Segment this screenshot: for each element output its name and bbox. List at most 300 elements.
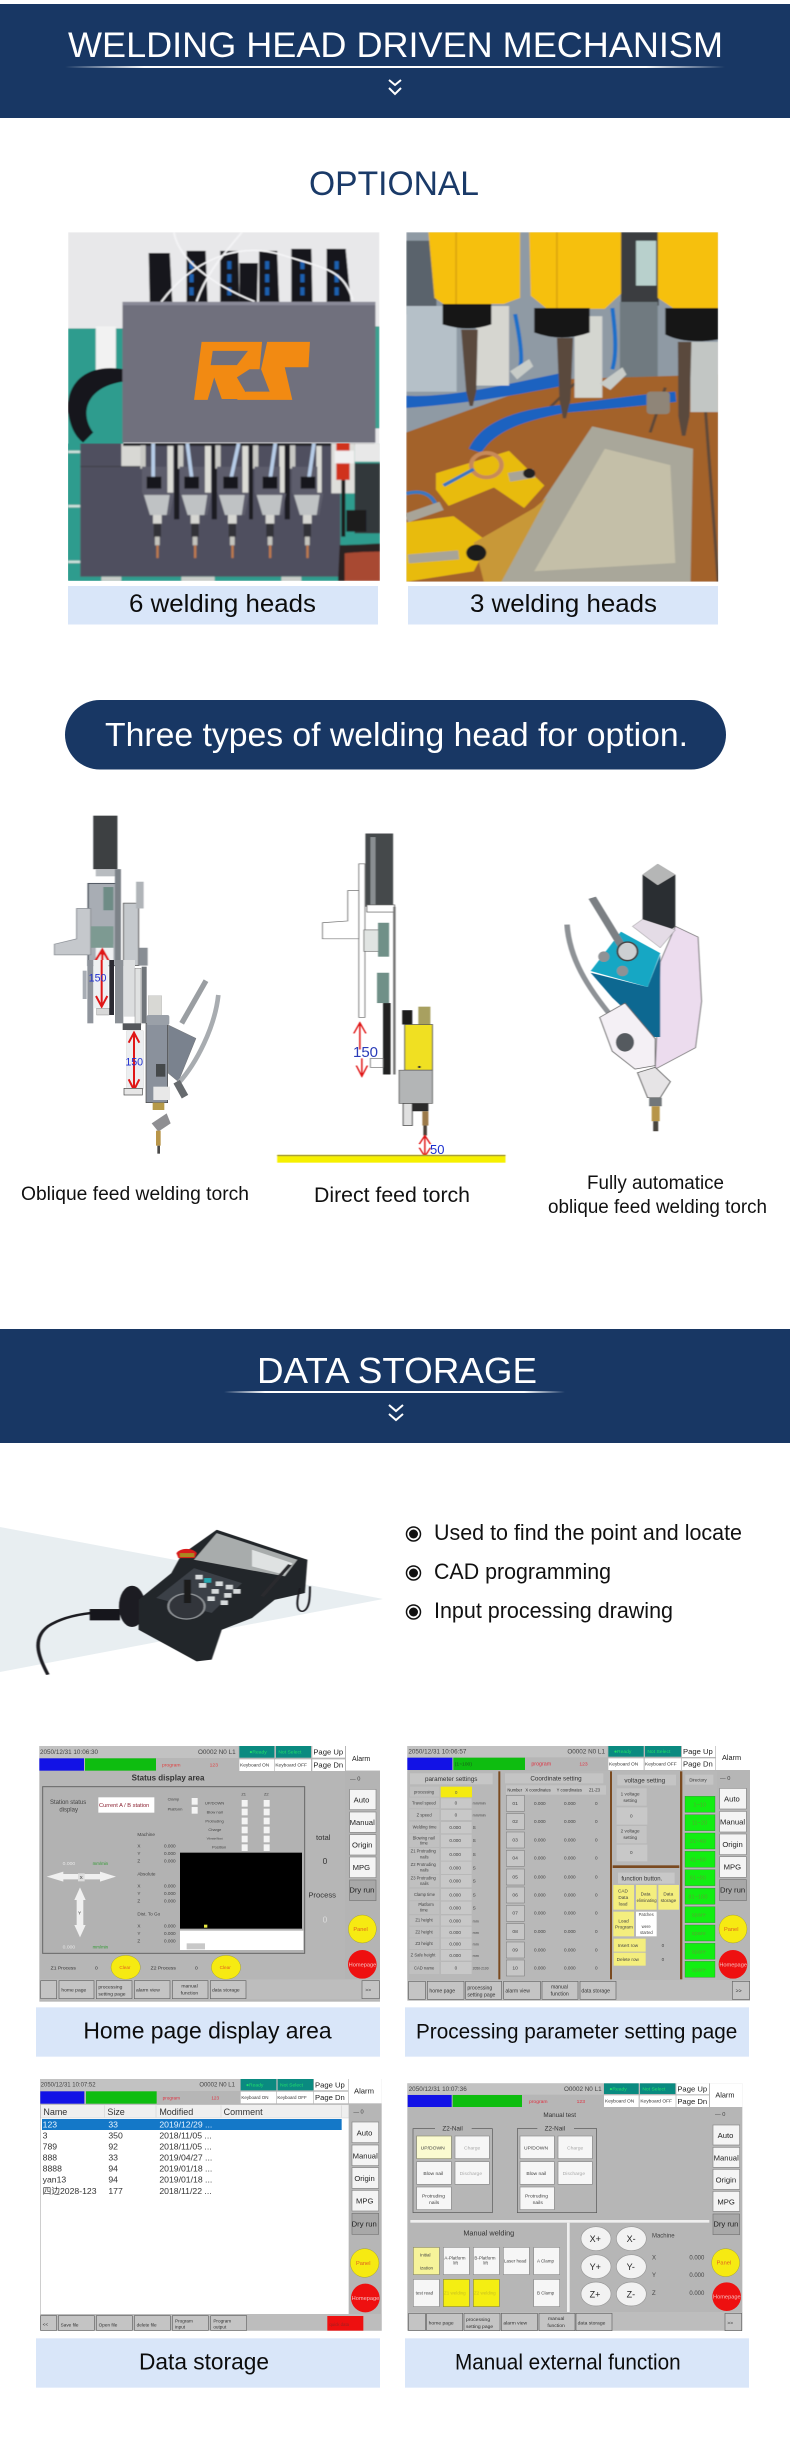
panel: processing parameter setting page: 0.000 <box>449 1941 461 1946</box>
panel: processing parameter setting page: 0 <box>455 1801 458 1806</box>
panel: home page display area: mm/min <box>93 1861 109 1866</box>
panel: data storage: Program <box>213 2318 231 2323</box>
caption: Oblique feed welding torch <box>21 1184 249 1205</box>
panel: processing parameter setting page: Data <box>663 1892 674 1897</box>
panel: processing parameter setting page: 0 <box>662 1957 665 1962</box>
panel: manual external function: Protruding <box>525 2193 548 2199</box>
panel: manual external function: nails <box>533 2200 543 2206</box>
panel: home page display area: Process <box>308 1891 336 1900</box>
diagram: direct feed torch: 150 <box>353 1044 378 1061</box>
head unit repeated five times <box>140 443 179 558</box>
panel: manual external function: Z1 welding <box>444 2290 466 2295</box>
panel: home page display area: 0.000 <box>63 1861 75 1867</box>
panel: manual external function: Panel <box>717 2261 731 2267</box>
diagram: oblique feed welding torch <box>21 816 249 1205</box>
panel: home page display area: display <box>59 1807 78 1813</box>
panel: data storage: Save file <box>61 2322 79 2327</box>
panel: data storage: output <box>213 2325 227 2330</box>
panel: home page display area: 0 <box>95 1965 98 1971</box>
panel: processing parameter setting page: were <box>642 1924 651 1929</box>
panel: manual external function: setting page <box>466 2324 493 2330</box>
panel: home page display area: 0.000 <box>164 1844 176 1849</box>
panel: processing parameter setting page: Page Dn <box>683 1760 713 1769</box>
panel: manual external function: Auto <box>718 2131 733 2140</box>
panel: processing parameter setting page: Auto <box>724 1794 740 1803</box>
panel: data storage: Panel <box>356 2261 370 2267</box>
illustration: handheld controller <box>0 1527 383 1675</box>
panel: processing parameter setting page: 0 <box>455 1966 458 1971</box>
panel: data storage: << <box>43 2322 48 2327</box>
panel: processing parameter setting page: home page <box>429 1989 455 1995</box>
panel: processing parameter setting page: Keyboard ON <box>609 1762 639 1768</box>
panel: processing parameter setting page: 0.000 <box>564 1856 576 1861</box>
panel: home page display area: 0.000 <box>164 1891 176 1896</box>
panel: home page display area: total <box>316 1833 331 1842</box>
panel: home page display area: Position <box>212 1845 226 1850</box>
panel: processing parameter setting page: Homepage <box>719 1962 747 1968</box>
panel: data storage: 2050/12/31 10:07:52 <box>41 2083 96 2089</box>
panel: processing parameter setting page: 123 <box>579 1762 588 1768</box>
panel: processing parameter setting page: Origin <box>722 1840 743 1849</box>
panel: processing parameter setting page: Travel speed <box>412 1801 437 1806</box>
panel: home page display area: Platform <box>168 1807 183 1812</box>
panel: home page display area: Current A / B station <box>99 1803 149 1809</box>
file list <box>41 2105 349 2314</box>
caption <box>36 2338 380 2388</box>
panel: processing parameter setting page: Patches <box>639 1912 654 1917</box>
file list: 四边2028-123 <box>43 2186 97 2196</box>
panel: processing parameter setting page: (1~100) <box>455 1762 472 1768</box>
panel: processing parameter setting page: MPG <box>724 1863 741 1872</box>
panel: manual external function: Not Select <box>642 2086 666 2092</box>
panel: home page display area: setting page <box>98 1992 126 1998</box>
panel: home page display area: Z <box>137 1899 140 1904</box>
panel: processing parameter setting page: function button. <box>621 1876 663 1882</box>
panel: home page display area: Station status <box>50 1800 86 1806</box>
panel: home page display area: X <box>137 1924 141 1929</box>
panel: home page display area: Y <box>137 1851 140 1856</box>
panel: manual external function: Z2 welding <box>474 2290 496 2295</box>
panel: home page display area <box>36 1746 380 2057</box>
icon: double chevron <box>389 80 401 94</box>
panel: processing parameter setting page: Panel <box>724 1927 738 1933</box>
panel: home page display area: Homepage <box>349 1962 376 1968</box>
panel: processing parameter setting page: spare <box>692 1967 706 1973</box>
panel: processing parameter setting page: Delete row <box>617 1957 640 1962</box>
panel: processing parameter setting page: Data <box>618 1895 629 1900</box>
panel: processing parameter setting page: nails <box>420 1868 429 1873</box>
caption: 3 welding heads <box>408 586 718 624</box>
panel: processing parameter setting page: spare <box>692 1931 706 1937</box>
panel: processing parameter setting page: Page Up <box>683 1747 713 1756</box>
panel: processing parameter setting page: 0 <box>595 1947 598 1952</box>
panel: data storage: Data storage <box>139 2348 269 2374</box>
panel: processing parameter setting page: 0.000 <box>449 1825 461 1830</box>
panel: home page display area: 0.000 <box>164 1924 176 1929</box>
panel: processing parameter setting page: 0.000 <box>564 1819 576 1824</box>
panel: processing parameter setting page: 0.000 <box>564 1965 576 1970</box>
panel: manual external function: Discharge <box>563 2171 585 2177</box>
panel: home page display area: Page Up <box>313 1747 343 1756</box>
panel: processing parameter setting page: 11~20 <box>692 1821 707 1827</box>
panel: home page display area: Machine <box>137 1832 155 1837</box>
panel: processing parameter setting page: 2050-2100 <box>473 1966 489 1970</box>
panel: manual external function: lift <box>453 2261 459 2266</box>
panel: home page display area: 0.000 <box>164 1859 176 1864</box>
panel: processing parameter setting page: Z speed <box>417 1812 432 1817</box>
panel: home page display area: 0.000 <box>63 1944 75 1950</box>
torch lower assembly <box>83 960 218 1154</box>
panel: home page display area: 0.000 <box>164 1931 176 1936</box>
panel: processing parameter setting page: 0.000 <box>449 1918 461 1923</box>
panel: processing parameter setting page: alarm view <box>505 1989 530 1995</box>
panel: processing parameter setting page: Clamp time <box>414 1892 436 1897</box>
panel: processing parameter setting page: S <box>473 1906 476 1911</box>
panel: data storage: MPG <box>356 2197 373 2206</box>
panel: manual external function <box>405 2083 749 2388</box>
panel: processing parameter setting page <box>405 1746 750 2057</box>
panel: processing parameter setting page: S <box>473 1879 476 1884</box>
panel: manual external function: Z <box>652 2291 656 2297</box>
panel: processing parameter setting page: storage <box>661 1898 677 1903</box>
panel: processing parameter setting page: 0.000 <box>564 1874 576 1879</box>
panel: processing parameter setting page: function <box>551 1991 569 1997</box>
panel: manual external function: nails <box>429 2200 440 2206</box>
panel: processing parameter setting page: Directory <box>689 1777 707 1782</box>
panel: processing parameter setting page: voltage setting <box>624 1777 666 1784</box>
file list: 94 <box>108 2163 118 2173</box>
panel: home page display area: alarm view <box>136 1988 160 1994</box>
panel: processing parameter setting page: 0 <box>595 1874 598 1879</box>
photo: 6 welding heads <box>68 232 380 581</box>
panel: processing parameter setting page: manual <box>551 1984 568 1990</box>
panel: home page display area: Protruding <box>205 1818 224 1823</box>
panel: processing parameter setting page: Alarm <box>722 1753 741 1762</box>
panel: manual external function: A Clamp <box>537 2259 554 2264</box>
caption: 6 welding heads <box>68 586 378 624</box>
panel: data storage: Not Select <box>280 2083 304 2089</box>
panel: manual external function: Manual <box>714 2153 739 2162</box>
panel: data storage: Origin <box>354 2174 375 2183</box>
panel: processing parameter setting page: Load <box>618 1918 629 1923</box>
panel: processing parameter setting page: O0002 N0 L1 <box>567 1749 605 1756</box>
panel: processing parameter setting page: 0 <box>595 1892 598 1897</box>
panel: home page display area: MPG <box>353 1863 370 1872</box>
panel: manual external function: Manual external function <box>455 2349 681 2374</box>
panel: processing parameter setting page: 0 <box>662 1943 665 1948</box>
file list: 123 <box>43 2119 57 2129</box>
icon: double chevron <box>389 1405 403 1420</box>
panel: home page display area: Z1 Process <box>51 1965 76 1971</box>
panel: processing parameter setting page: mm <box>473 1954 479 1958</box>
panel: processing parameter setting page: Data <box>641 1892 651 1897</box>
panel: home page display area: 0.000 <box>164 1899 176 1904</box>
panel: processing parameter setting page: 0.000 <box>449 1930 461 1935</box>
panel: processing parameter setting page: 0 <box>630 1813 633 1818</box>
panel: manual external function: Origin <box>716 2176 736 2185</box>
panel: processing parameter setting page: Y coordinates <box>557 1787 582 1792</box>
panel: processing parameter setting page: Z1 Protruding <box>411 1849 437 1854</box>
panel: processing parameter setting page: 0.000 <box>534 1947 546 1952</box>
panel: processing parameter setting page: 03 <box>512 1837 518 1843</box>
panel: processing parameter setting page: 0 <box>595 1965 598 1970</box>
diagram: fully automatic oblique feed torch: oblique feed welding torch <box>548 1197 767 1218</box>
title: WELDING HEAD DRIVEN MECHANISM <box>68 26 723 65</box>
panel: data storage: ●Ready <box>246 2083 264 2089</box>
panel: processing parameter setting page: — 0 <box>720 1776 730 1782</box>
panel: manual external function: Alarm <box>715 2090 734 2099</box>
file list: 92 <box>108 2141 118 2151</box>
panel: manual external function: Manual test <box>543 2112 576 2119</box>
panel: manual external function: Page Dn <box>677 2097 707 2106</box>
panel: data storage: Dry run <box>352 2220 377 2229</box>
panel: data storage: Program <box>175 2318 193 2323</box>
panel: processing parameter setting page: 0.000 <box>449 1953 461 1958</box>
panel: manual external function: 0.000 <box>689 2273 705 2279</box>
caption: 6 welding heads: 6 welding heads <box>129 590 316 618</box>
caption <box>405 2338 749 2388</box>
panel: processing parameter setting page: 0.000 <box>564 1892 576 1897</box>
panel: home page display area: Keyboard OFF <box>275 1763 307 1769</box>
panel: processing parameter setting page: 81~100 <box>688 1894 707 1900</box>
panel: data storage: Manual <box>353 2151 378 2160</box>
file list: 888 <box>43 2152 57 2162</box>
file list: 2019/01/18 ... <box>159 2175 212 2185</box>
panel: processing parameter setting page: parameter settings <box>425 1776 477 1783</box>
panel: processing parameter setting page: 08 <box>512 1929 518 1935</box>
torch lower assembly: 150 <box>125 1056 143 1068</box>
panel: home page display area: X <box>137 1844 141 1849</box>
panel: data storage: quick data <box>329 2322 350 2327</box>
panel: processing parameter setting page: 0.000 <box>534 1911 546 1916</box>
file list: 33 <box>108 2119 118 2129</box>
panel: manual external function: X+ <box>590 2234 601 2244</box>
panel: processing parameter setting page: 41~60 <box>690 1857 706 1863</box>
panel: processing parameter setting page: mm/min <box>473 1813 486 1817</box>
panel: home page display area: O0002 N0 L1 <box>198 1749 236 1756</box>
panel: manual external function: Y+ <box>590 2262 601 2272</box>
panel: processing parameter setting page: 0 <box>595 1819 598 1824</box>
panel: processing parameter setting page: 1~10 <box>693 1802 706 1808</box>
panel: processing parameter setting page: time <box>420 1840 429 1845</box>
panel: data storage: Page Up <box>315 2080 345 2089</box>
file list: Size <box>107 2107 125 2117</box>
panel: home page display area: 0 <box>195 1965 198 1971</box>
panel: manual external function: Initial <box>420 2253 430 2258</box>
file list: 2019/01/18 ... <box>159 2163 212 2173</box>
header band: welding head driven mechanism <box>0 4 790 118</box>
panel: processing parameter setting page: time <box>420 1908 429 1913</box>
panel: processing parameter setting page: setting page <box>467 1992 496 1998</box>
panel: manual external function: Page Up <box>677 2085 707 2094</box>
panel: processing parameter setting page: 0 <box>595 1837 598 1842</box>
panel: manual external function: UP/DOWN <box>421 2145 445 2151</box>
panel: home page display area: Y <box>137 1891 140 1896</box>
panel: data storage: Auto <box>357 2128 372 2137</box>
panel: processing parameter setting page: 0 <box>630 1850 633 1855</box>
panel: processing parameter setting page: mm <box>473 1919 479 1923</box>
panel: home page display area: 123 <box>210 1763 218 1769</box>
panel: home page display area: Z2 Process <box>151 1965 176 1971</box>
file list: 350 <box>108 2130 123 2140</box>
diagram: direct feed torch: 50 <box>430 1142 444 1157</box>
pill heading: three types of welding head <box>65 700 726 770</box>
panel: processing parameter setting page: mm <box>473 1942 479 1946</box>
diagram: fully automatic oblique feed torch <box>548 864 767 1218</box>
panel: processing parameter setting page: Z Safe height <box>411 1953 436 1958</box>
photo detail: welding head row <box>68 442 380 581</box>
photo: 3 welding heads <box>406 232 718 582</box>
panel: home page display area: Z1 <box>241 1791 247 1796</box>
panel: processing parameter setting page: 0.000 <box>564 1801 576 1806</box>
panel: home page display area: Alarm <box>352 1756 370 1763</box>
panel: manual external function: alarm view <box>503 2320 528 2326</box>
panel: manual external function: Manual welding <box>463 2228 514 2237</box>
file list: 2019/04/27 ... <box>159 2152 212 2162</box>
panel: processing parameter setting page: 0 <box>595 1856 598 1861</box>
panel: processing parameter setting page: Program <box>615 1925 633 1930</box>
panel: home page display area: mm/min <box>93 1944 109 1949</box>
panel: processing parameter setting page: 0.000 <box>534 1819 546 1824</box>
file list: 8888 <box>43 2163 62 2173</box>
file list: 789 <box>43 2141 57 2151</box>
panel: manual external function: 0.000 <box>689 2256 705 2262</box>
panel: manual external function: Protruding <box>422 2193 445 2199</box>
panel: home page display area: >> <box>365 1988 371 1994</box>
panel: processing parameter setting page: S <box>473 1852 476 1857</box>
panel: processing parameter setting page: Z2 height <box>415 1929 434 1934</box>
caption <box>36 2007 380 2057</box>
file list: Modified <box>159 2107 193 2117</box>
panel: home page display area: ●Ready <box>249 1750 267 1756</box>
panel: processing parameter setting page: 01 <box>512 1801 518 1807</box>
panel: processing parameter setting page: Coordinate setting <box>530 1776 582 1783</box>
panel: manual external function: Machine <box>652 2233 675 2239</box>
panel: processing parameter setting page: 0.000 <box>449 1852 461 1857</box>
panel: processing parameter setting page: load <box>619 1901 628 1906</box>
panel: home page display area: home page <box>61 1988 87 1994</box>
panel: home page display area: Blow nail <box>207 1809 223 1814</box>
panel: manual external function: Keyboard ON <box>605 2099 635 2105</box>
panel: processing parameter setting page: 0.000 <box>534 1965 546 1970</box>
file list: Name <box>43 2107 67 2117</box>
item: CAD programming: CAD programming <box>434 1559 611 1584</box>
panel: home page display area: manual <box>181 1983 198 1989</box>
panel: home page display area: Auto <box>354 1795 369 1804</box>
panel: home page display area: Clamp <box>168 1797 180 1802</box>
panel: processing parameter setting page: ●Ready <box>614 1749 632 1755</box>
panel: data storage: Keyboard ON <box>241 2095 269 2100</box>
panel: processing parameter setting page: Blowing nail <box>413 1835 435 1840</box>
panel: home page display area: Dist. To Go <box>137 1912 161 1917</box>
panel: processing parameter setting page: Not Select <box>647 1749 671 1755</box>
panel: home page display area: Home page display area <box>83 2017 332 2043</box>
panel: manual external function: program <box>529 2099 548 2105</box>
panel: processing parameter setting page: mm <box>473 1931 479 1935</box>
panel: data storage: input <box>175 2325 186 2330</box>
panel: processing parameter setting page: X coordinates <box>525 1787 551 1792</box>
panel: home page display area: Vibrate/float <box>207 1837 223 1841</box>
panel: processing parameter setting page: 05 <box>512 1874 518 1880</box>
panel: processing parameter setting page: Z1 height <box>415 1918 434 1923</box>
panel: manual external function: Z2-Nail <box>545 2126 565 2133</box>
panel: processing parameter setting page: nails <box>420 1854 429 1859</box>
panel: processing parameter setting page: 0.000 <box>449 1865 461 1870</box>
panel: manual external function: Y- <box>627 2262 635 2272</box>
panel: processing parameter setting page: eliminating <box>637 1898 657 1903</box>
panel: home page display area: program <box>162 1763 181 1769</box>
panel: processing parameter setting page: >> <box>736 1989 742 1995</box>
panel: processing parameter setting page: Manual <box>720 1817 745 1826</box>
panel: manual external function: Y <box>652 2273 656 2279</box>
panel: processing parameter setting page: 0.000 <box>534 1856 546 1861</box>
panel: manual external function: home page <box>429 2320 454 2326</box>
panel: data storage: — 0 <box>353 2109 364 2115</box>
panel: manual external function: Blow nail <box>423 2171 443 2177</box>
panel: home page display area: Y <box>137 1931 140 1936</box>
panel: manual external function: B-Platform <box>474 2255 496 2260</box>
panel: processing parameter setting page: S <box>473 1838 476 1843</box>
panel: processing parameter setting page: data storage <box>581 1989 610 1995</box>
panel: home page display area: Status display area <box>132 1774 205 1783</box>
item: input drawing: Input processing drawing <box>434 1598 673 1623</box>
panel: home page display area: X <box>137 1884 141 1889</box>
panel: processing parameter setting page: 0.000 <box>449 1838 461 1843</box>
panel: processing parameter setting page: Z1-Z3 <box>589 1787 601 1792</box>
panel: manual external function: Z2-Nail <box>442 2126 463 2133</box>
panel: manual external function: manual <box>548 2316 564 2322</box>
panel: home page display area: 0.000 <box>164 1939 176 1944</box>
panel: processing parameter setting page: setting <box>623 1798 637 1803</box>
panel: home page display area: Manual <box>350 1818 375 1827</box>
panel: home page display area: data storage <box>212 1988 240 1994</box>
panel: processing parameter setting page: 0 <box>595 1801 598 1806</box>
panel: manual external function: A-Platform <box>444 2255 466 2260</box>
panel: manual external function: Charge <box>567 2145 584 2151</box>
logo: RS <box>194 342 310 400</box>
panel: data storage: O0002 N0 L1 <box>199 2083 236 2089</box>
panel: processing parameter setting page: 0.000 <box>534 1874 546 1879</box>
panel: manual external function: 123 <box>577 2099 585 2105</box>
panel: processing parameter setting page: 09 <box>512 1947 518 1953</box>
panel: manual external function: X- <box>627 2234 636 2244</box>
panel: home page display area: Charge <box>208 1827 222 1832</box>
panel: processing parameter setting page: Z3 height <box>415 1941 434 1946</box>
feature list <box>406 1520 742 1623</box>
panel: processing parameter setting page: 0.000 <box>449 1879 461 1884</box>
panel: manual external function: ●Ready <box>609 2086 627 2092</box>
panel: manual external function: Blow nail <box>526 2171 546 2177</box>
caption <box>405 2007 749 2057</box>
panel: manual external function: ization <box>420 2265 433 2270</box>
panel: processing parameter setting page: 07 <box>512 1911 518 1917</box>
panel: home page display area: function <box>181 1991 198 1997</box>
panel: manual external function: function <box>547 2323 565 2329</box>
file list: 2018/11/05 ... <box>159 2130 212 2140</box>
panel: data storage: Homepage <box>352 2296 379 2302</box>
panel: data storage: Page Dn <box>315 2093 345 2102</box>
panel: manual external function: MPG <box>717 2197 735 2206</box>
caption: Direct feed torch <box>314 1184 470 1207</box>
panel: manual external function: Charge <box>464 2145 481 2151</box>
panel: home page display area: X <box>80 1875 84 1880</box>
panel: processing parameter setting page: CAD <box>618 1889 628 1894</box>
panel: home page display area: Clear <box>119 1965 131 1970</box>
panel: home page display area: 2050/12/31 10:06:30 <box>40 1749 99 1756</box>
caption: Fully automatice <box>587 1173 724 1194</box>
panel: home page display area: Page Dn <box>313 1761 343 1770</box>
panel: processing parameter setting page: CAD name <box>414 1965 435 1970</box>
